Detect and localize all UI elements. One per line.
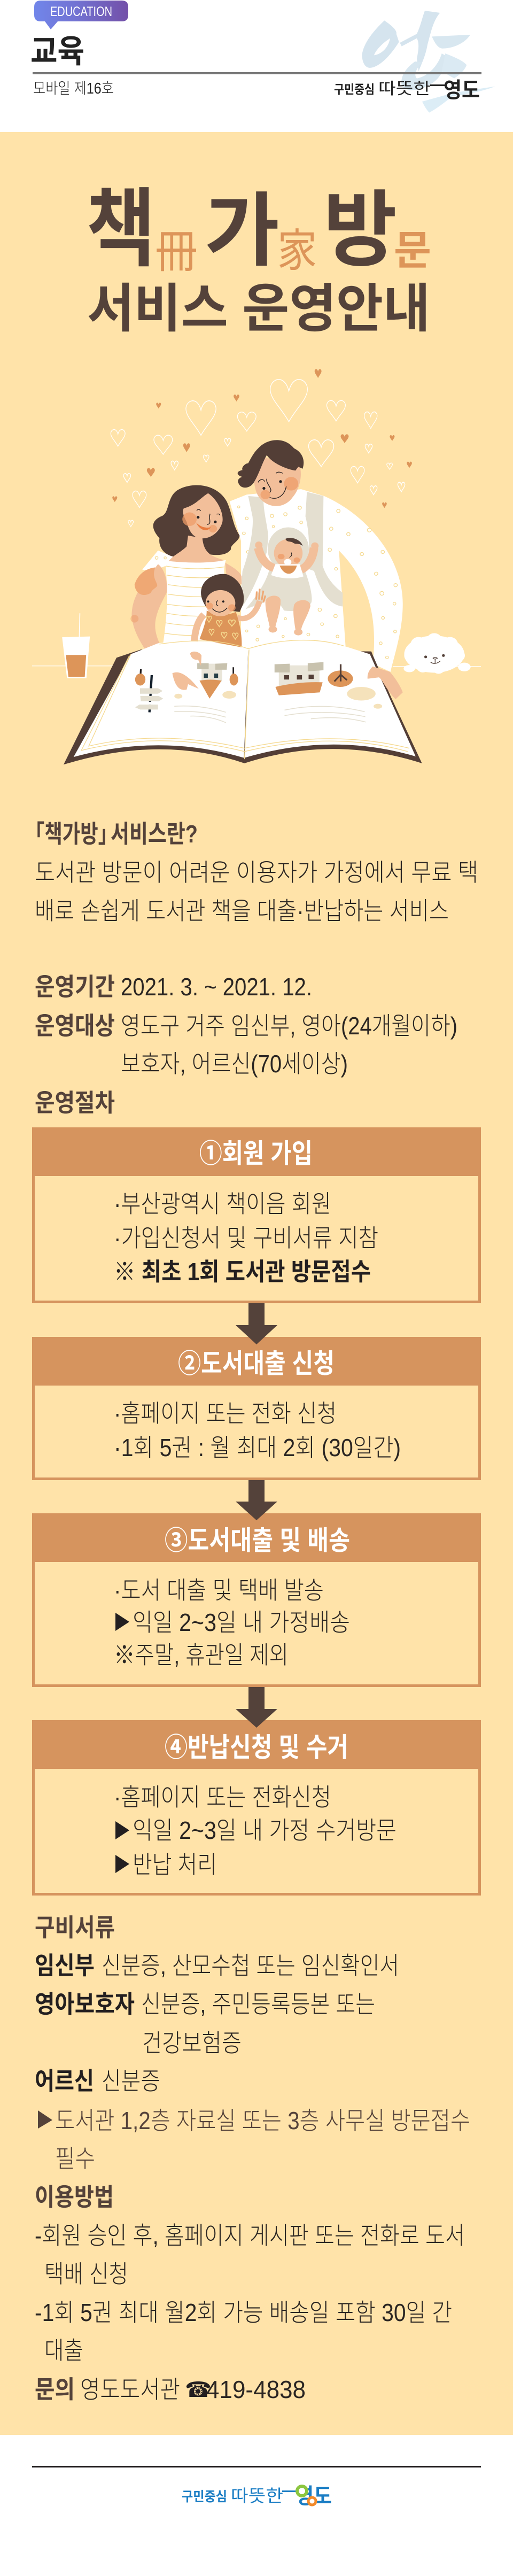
required documents bbox=[35, 1914, 470, 2172]
contact: 영도도서관 bbox=[80, 2376, 180, 2403]
contact: ☎ bbox=[185, 2378, 212, 2402]
main title: 가 bbox=[205, 186, 279, 276]
logo: 구민중심 따뜻한 영도: 구민중심 bbox=[334, 82, 375, 96]
contact bbox=[35, 2376, 306, 2403]
step 3 panel: ·도서 대출 및 택배 발송 bbox=[114, 1576, 324, 1604]
intro block: 배로 손쉽게 도서관 책을 대출·반납하는 서비스 bbox=[35, 897, 449, 925]
step 1 panel: ·가입신청서 및 구비서류 지참 bbox=[114, 1224, 378, 1252]
dog bbox=[403, 633, 471, 674]
how to use: 택배 신청 bbox=[44, 2260, 128, 2288]
step 3 panel: ※주말, 휴관일 제외 bbox=[114, 1641, 289, 1669]
step 2 panel: ·1회 5권 : 월 최대 2회 (30일간) bbox=[114, 1434, 401, 1461]
how to use: -회원 승인 후, 홈페이지 게시판 또는 전화로 도서 bbox=[35, 2222, 465, 2249]
step 1 panel: ①회원 가입 bbox=[199, 1139, 313, 1169]
mother bbox=[130, 485, 242, 683]
operation info: 운영절차 bbox=[35, 1089, 115, 1117]
how to use: 대출 bbox=[44, 2337, 83, 2364]
main title: 家 bbox=[277, 226, 317, 276]
step 4 panel: ④반납신청 및 수거 bbox=[165, 1732, 348, 1762]
table line bbox=[32, 666, 481, 667]
required documents: 임신부 bbox=[35, 1952, 95, 1979]
cup bbox=[62, 613, 90, 678]
operation info: 영도구 거주 임신부, 영아(24개월이하) bbox=[121, 1012, 457, 1040]
carrier bbox=[239, 492, 343, 611]
main title: 책 bbox=[86, 181, 156, 277]
operation info bbox=[35, 973, 457, 1117]
step 2 panel bbox=[32, 1337, 481, 1480]
footer logo: 영도 bbox=[296, 2485, 332, 2508]
step 4 panel: ·홈페이지 또는 전화신청 bbox=[114, 1783, 331, 1811]
contact: 문의 bbox=[35, 2376, 75, 2403]
required documents: 구비서류 bbox=[35, 1914, 115, 1941]
step 4 panel: 익일 2~3일 내 가정 수거방문 bbox=[133, 1816, 397, 1844]
logo: 구민중심 따뜻한 영도 bbox=[334, 79, 480, 102]
step 3 panel bbox=[32, 1513, 481, 1687]
how to use: -1회 5권 최대 월2회 가능 배송일 포함 30일 간 bbox=[35, 2299, 452, 2326]
main title: 방 bbox=[323, 184, 397, 276]
step 2 panel: ②도서대출 신청 bbox=[178, 1349, 335, 1379]
required documents: 영아보호자 bbox=[35, 1990, 135, 2018]
watermark: brush calligraphy bbox=[362, 11, 495, 113]
step 4 panel bbox=[32, 1720, 481, 1896]
main title: 冊 bbox=[155, 227, 198, 277]
required documents: 신분증 bbox=[102, 2067, 160, 2095]
step 3 panel: ③도서대출 및 배송 bbox=[165, 1526, 350, 1556]
footer rule bbox=[32, 2466, 481, 2467]
step 1 panel: ·부산광역시 책이음 회원 bbox=[114, 1190, 331, 1218]
how to use: 이용방법 bbox=[35, 2183, 114, 2211]
father bbox=[142, 440, 403, 672]
header bbox=[30, 1, 495, 113]
main title bbox=[86, 181, 431, 277]
book pictures bbox=[135, 662, 382, 723]
footer logo: 따뜻한 bbox=[231, 2486, 283, 2505]
contact: 419-4838 bbox=[206, 2376, 306, 2403]
required documents: 어르신 bbox=[35, 2067, 94, 2095]
open book bbox=[64, 640, 422, 764]
operation info: 2021. 3. ~ 2021. 12. bbox=[121, 973, 312, 1001]
footer logo bbox=[182, 2485, 332, 2508]
operation info: 운영대상 bbox=[35, 1012, 115, 1040]
subtitle: 서비스 운영안내 bbox=[87, 279, 430, 338]
badge: EDUCATION: EDUCATION bbox=[50, 4, 112, 19]
arrow: step 1 to 2 bbox=[236, 1303, 277, 1344]
issue number: 모바일 제16호 bbox=[33, 80, 114, 97]
step 1 panel: ※ 최초 1회 도서관 방문접수 bbox=[114, 1258, 371, 1286]
baby bbox=[255, 538, 318, 636]
illustration: family reading a book bbox=[32, 369, 481, 764]
arrow: step 3 to 4 bbox=[236, 1687, 277, 1728]
how to use bbox=[35, 2183, 465, 2364]
child bbox=[194, 574, 266, 653]
arrow: step 2 to 3 bbox=[236, 1480, 277, 1520]
footer logo: 구민중심 bbox=[182, 2489, 227, 2504]
hearts bbox=[111, 380, 405, 527]
hands bbox=[172, 652, 403, 699]
badge: EDUCATION bbox=[34, 1, 128, 29]
logo: 구민중심 따뜻한 영도: 영도 bbox=[444, 79, 480, 102]
section title: 교육 bbox=[30, 34, 84, 69]
intro block: 서비스란? bbox=[111, 820, 198, 848]
operation info: 운영기간 bbox=[35, 973, 115, 1001]
required documents: 신분증, 주민등록등본 또는 bbox=[141, 1990, 375, 2018]
step 2 panel: ·홈페이지 또는 전화 신청 bbox=[114, 1399, 337, 1427]
logo: 구민중심 따뜻한 영도: 따뜻한 bbox=[378, 80, 431, 98]
intro block: 「책가방」 bbox=[25, 820, 118, 848]
step 1 panel bbox=[32, 1127, 481, 1303]
required documents: 신분증, 산모수첩 또는 임신확인서 bbox=[102, 1952, 399, 1979]
step 3 panel: 익일 2~3일 내 가정배송 bbox=[133, 1608, 350, 1636]
required documents: 필수 bbox=[55, 2145, 95, 2172]
operation info: 보호자, 어르신(70세이상) bbox=[121, 1050, 348, 1078]
intro block bbox=[25, 820, 478, 925]
main title: 문 bbox=[394, 228, 431, 274]
step 4 panel: 반납 처리 bbox=[133, 1851, 217, 1878]
required documents: 건강보험증 bbox=[142, 2029, 242, 2057]
